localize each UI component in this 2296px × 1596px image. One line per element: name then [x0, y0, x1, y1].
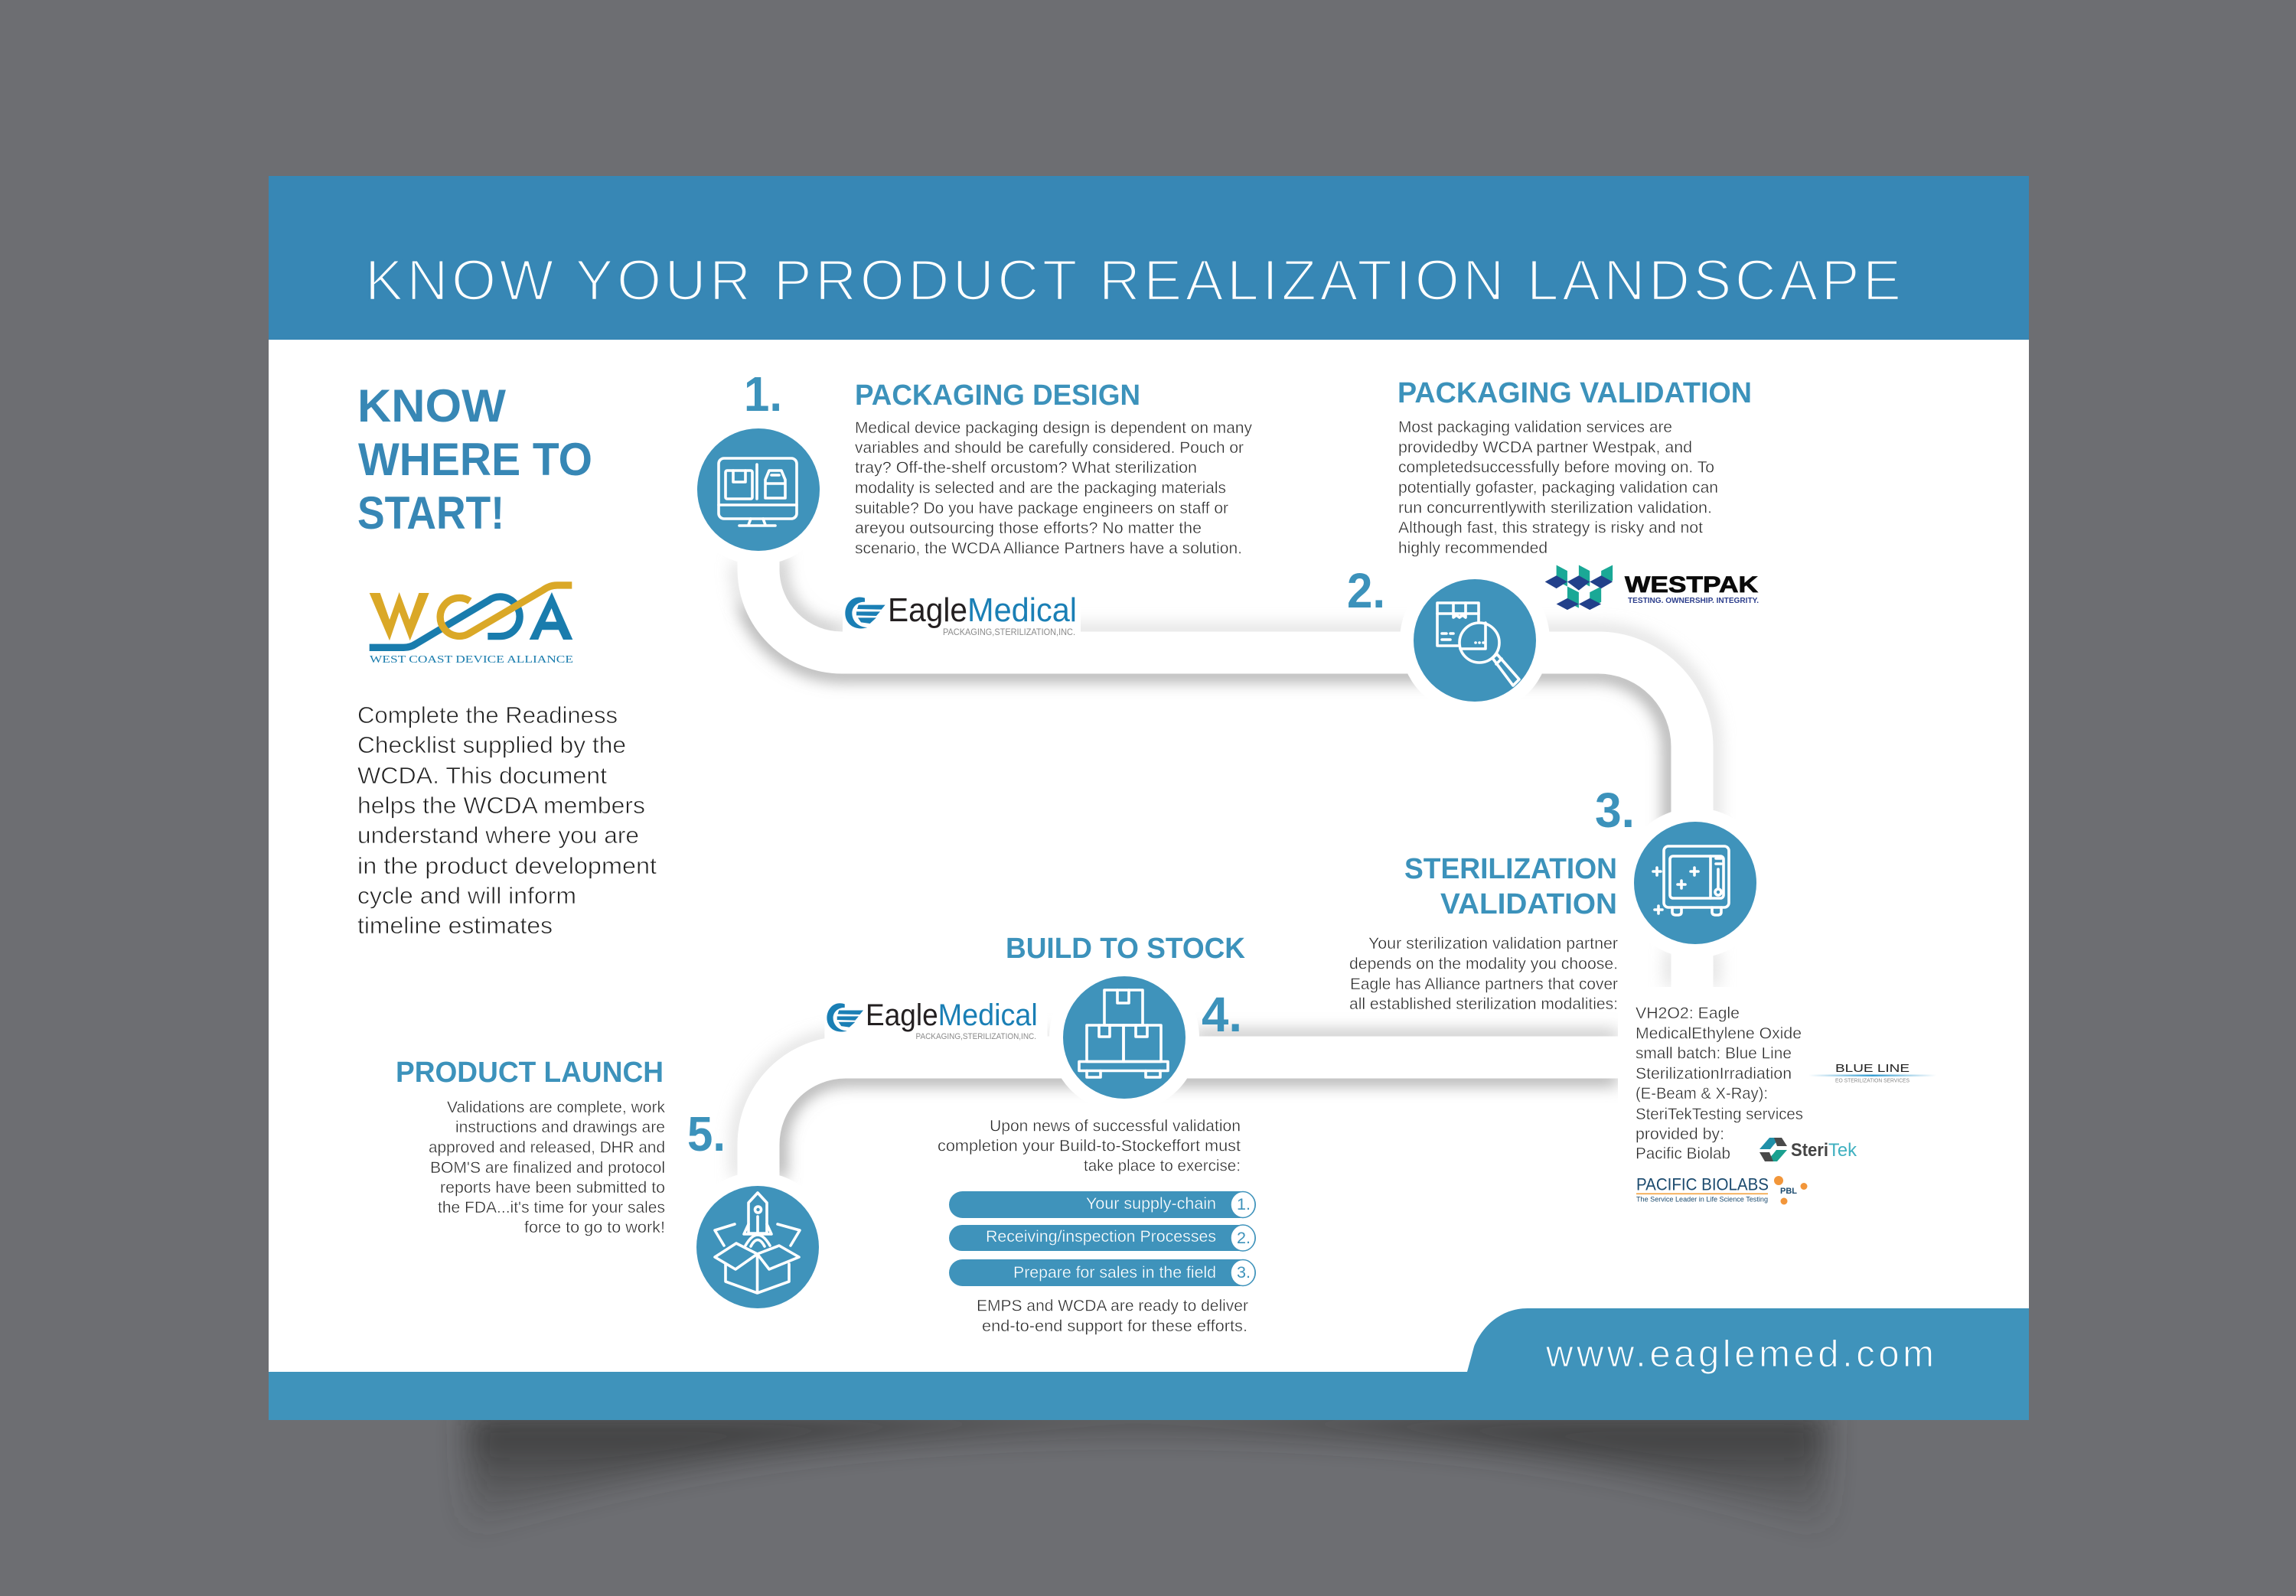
text: packaging validation — [1398, 419, 1718, 557]
text: sterilization partners: VH2O2: Eagle — [1636, 1005, 1740, 1022]
text: sterilization partners: (E-Beam & X-Ray): — [1636, 1085, 1768, 1103]
text: readiness checklist: timeline estimates — [357, 912, 553, 939]
logo: Blue Line: EO STERILIZATION SERVICES — [1835, 1079, 1910, 1083]
text: readiness checklist: understand where you are — [357, 822, 639, 848]
heading: build to stock: BUILD TO STOCK — [1006, 933, 1246, 965]
text: product launch: approved and released, DHR and — [429, 1138, 665, 1157]
logo: WCDA — [370, 585, 573, 666]
logo: SteriTek — [1760, 1138, 1857, 1161]
text: packaging design — [855, 419, 1252, 557]
heading: know where to start: WHERE TO — [358, 434, 592, 485]
text: sterilization validation: all established sterilization modalities: — [1349, 995, 1618, 1013]
text: EMPS and WCDA: end-to-end support for these efforts. — [982, 1318, 1247, 1335]
text: product launch: the FDA...it's time for your sales — [438, 1199, 665, 1217]
number 5: 5. — [687, 1106, 726, 1161]
text: packaging design: suitable? Do you have package engineers on staff or — [855, 500, 1228, 517]
pill 1: supply chain — [949, 1191, 1256, 1218]
text: sterilization validation: Your sterilization validation partner — [1368, 935, 1618, 953]
text: packaging validation: Although fast, this strategy is risky and not — [1398, 519, 1703, 537]
logo: Eagle Medical (top) — [843, 589, 1081, 638]
pill 3: prepare for sales: 3. — [1237, 1264, 1251, 1282]
text: packaging validation: Most packaging validation services are — [1398, 419, 1672, 436]
pill 2: receiving — [949, 1225, 1256, 1251]
text: build to stock intro — [938, 1117, 1241, 1175]
logo: Westpak: WESTPAK — [1625, 572, 1758, 598]
text: readiness checklist: helps the WCDA members — [357, 792, 645, 819]
text: sterilization partners: provided by: — [1636, 1125, 1724, 1143]
text: readiness checklist — [357, 702, 657, 939]
text backing block — [1618, 987, 2024, 1293]
heading: packaging design: PACKAGING DESIGN — [855, 379, 1140, 412]
step 3 circle with sterilizer icon — [1620, 808, 1770, 958]
number 3: 3. — [1595, 783, 1635, 838]
heading: sterilization validation: VALIDATION — [1440, 888, 1617, 920]
panel: white sheet — [269, 176, 2029, 1420]
panel drop shadow — [468, 1415, 1825, 1530]
text: packaging validation: run concurrentlywith sterilization validation. — [1398, 499, 1712, 517]
text: product launch: Validations are complete, work — [447, 1099, 665, 1116]
text: packaging validation: providedby WCDA partner Westpak, and — [1398, 439, 1692, 456]
text: build to stock intro: completion your Build-to-Stockeffort must — [938, 1137, 1241, 1155]
text: packaging design: areyou outsourcing those efforts? No matter the — [855, 520, 1202, 537]
step 4 circle with stacked boxes icon — [1049, 962, 1199, 1112]
text: sterilization partners: small batch: Blue Line — [1636, 1045, 1792, 1062]
step 1 circle with monitor icon — [683, 415, 833, 565]
text: sterilization partners: SterilizationIrradiation — [1636, 1065, 1792, 1083]
text: readiness checklist: cycle and will inform — [357, 882, 576, 909]
pill 3: prepare for sales — [949, 1259, 1256, 1286]
text: sterilization validation: depends on the modality you choose. — [1349, 955, 1618, 973]
text: product launch: force to go to work! — [524, 1219, 665, 1236]
pill 2: receiving: Receiving/inspection Processes — [986, 1228, 1216, 1246]
logo: Eagle Medical (lower) — [824, 995, 1048, 1042]
heading: packaging validation: PACKAGING VALIDATION — [1397, 377, 1752, 409]
title: KNOW YOUR PRODUCT REALIZATION LANDSCAPE — [365, 248, 1901, 312]
logo: Pacific Biolabs: PBL — [1780, 1187, 1797, 1196]
text: product launch — [429, 1099, 665, 1236]
logo: Pacific Biolabs: PACIFIC BIOLABS — [1636, 1175, 1769, 1194]
text: EMPS and WCDA — [977, 1298, 1248, 1335]
logo: Eagle Medical (top): PACKAGING,STERILIZATION,INC. — [943, 627, 1075, 637]
text: sterilization validation — [1349, 935, 1618, 1013]
heading: sterilization validation: STERILIZATION — [1404, 853, 1617, 885]
logo: Eagle Medical (top): Eagle — [888, 591, 967, 629]
number 2: 2. — [1347, 563, 1385, 618]
logo: Eagle Medical (lower): PACKAGING,STERILIZATION,INC. — [916, 1032, 1036, 1041]
heading: product launch: PRODUCT LAUNCH — [396, 1057, 664, 1089]
text: packaging design: modality is selected and are the packaging materials — [855, 479, 1226, 497]
number 4: 4. — [1202, 987, 1242, 1042]
text: packaging design: Medical device packaging design is dependent on many — [855, 419, 1252, 437]
logo: Pacific Biolabs — [1636, 1175, 1808, 1204]
text: sterilization validation: Eagle has Alliance partners that cover — [1350, 976, 1618, 993]
pill 2: receiving: 2. — [1237, 1230, 1251, 1247]
text: build to stock intro: Upon news of successful validation — [990, 1117, 1241, 1135]
text: sterilization partners: Pacific Biolab — [1636, 1145, 1730, 1163]
text: readiness checklist: in the product development — [357, 852, 657, 879]
logo: Eagle Medical (top): Medical — [967, 591, 1077, 629]
website url: www.eaglemed.com — [1545, 1334, 1934, 1375]
logo: Eagle Medical (lower): Eagle — [866, 998, 938, 1032]
text: sterilization partners: MedicalEthylene Oxide — [1636, 1025, 1802, 1042]
pill 1: supply chain: Your supply-chain — [1086, 1195, 1216, 1213]
text: readiness checklist: Complete the Readiness — [357, 702, 618, 728]
logo: WCDA: WEST COAST DEVICE ALLIANCE — [370, 654, 573, 666]
text: build to stock intro: take place to exercise: — [1084, 1157, 1241, 1175]
text: packaging design: variables and should be carefully considered. Pouch or — [855, 439, 1244, 457]
logo: Eagle Medical (lower): Medical — [938, 998, 1038, 1032]
header band — [269, 176, 2029, 340]
text: readiness checklist: Checklist supplied by the — [357, 731, 626, 758]
text: readiness checklist: WCDA. This document — [357, 762, 607, 789]
text: sterilization partners — [1636, 1005, 1803, 1163]
heading: know where to start: KNOW — [357, 380, 506, 432]
step 5 circle with rocket icon — [683, 1172, 833, 1322]
heading: sterilization validation — [1404, 853, 1617, 920]
path ribbon with shadows — [738, 490, 1714, 1247]
text: packaging validation: potentially gofaster, packaging validation can — [1398, 479, 1718, 497]
pill 3: prepare for sales: Prepare for sales in the field — [1013, 1264, 1216, 1282]
heading: know where to start: START! — [357, 487, 504, 539]
text: product launch: reports have been submitted to — [440, 1179, 665, 1197]
pill 1: supply chain: 1. — [1237, 1196, 1251, 1213]
text: packaging design: tray? Off-the-shelf orcustom? What sterilization — [855, 459, 1197, 477]
logo: Pacific Biolabs: The Service Leader in Life Science Testing — [1636, 1195, 1768, 1204]
logo: Blue Line: BLUE LINE — [1835, 1062, 1910, 1075]
logo: Westpak — [1545, 565, 1759, 610]
logo: Blue Line — [1808, 1062, 1936, 1083]
text: packaging design: scenario, the WCDA Alliance Partners have a solution. — [855, 540, 1242, 557]
footer band with tab — [269, 1308, 2029, 1420]
text: sterilization partners: SteriTekTesting services — [1636, 1106, 1803, 1123]
text: EMPS and WCDA: EMPS and WCDA are ready to deliver — [977, 1298, 1248, 1314]
text: packaging validation: completedsuccessfully before moving on. To — [1398, 459, 1714, 476]
logo: SteriTek: Steri — [1791, 1140, 1828, 1161]
number 1: 1. — [744, 366, 782, 422]
logo: SteriTek: Tek — [1828, 1140, 1857, 1161]
logo: Westpak: TESTING. OWNERSHIP. INTEGRITY. — [1628, 597, 1759, 605]
text: product launch: BOM'S are finalized and protocol — [430, 1159, 665, 1177]
heading: know where to start — [357, 380, 592, 539]
step 2 circle with magnifier icon — [1400, 565, 1550, 715]
text: product launch: instructions and drawings are — [455, 1119, 665, 1136]
text: packaging validation: highly recommended — [1398, 539, 1548, 557]
